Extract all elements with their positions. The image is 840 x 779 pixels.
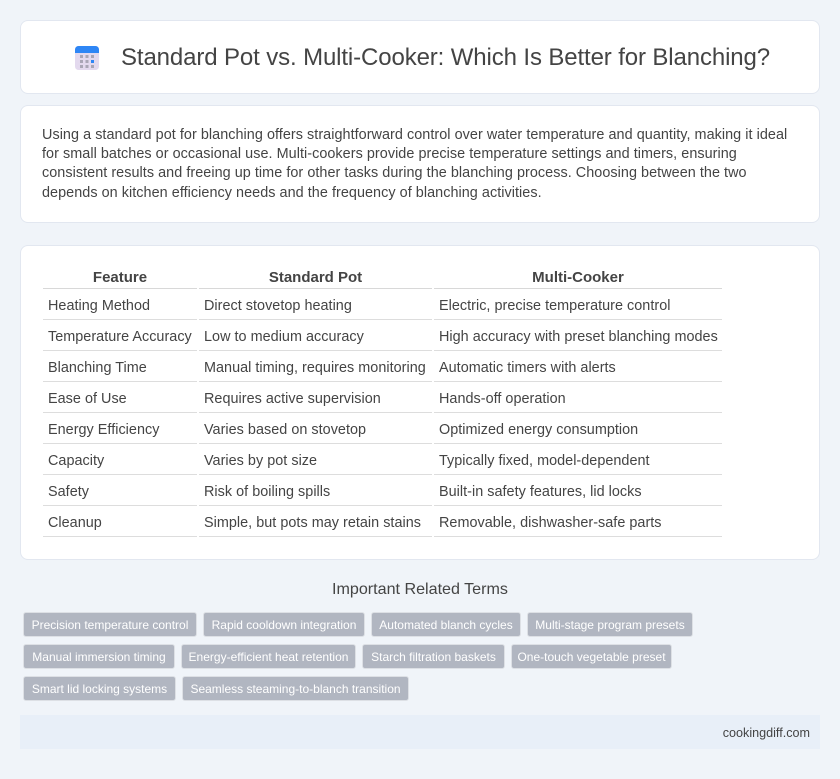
panel: comparison table xyxy=(20,245,820,560)
row: safety xyxy=(43,484,722,506)
panel: title card xyxy=(20,20,820,94)
row: capacity xyxy=(43,453,722,475)
footer bar xyxy=(20,715,820,749)
tag list: related terms: Starch filtration baskets xyxy=(371,650,496,664)
row: energy efficiency xyxy=(43,422,722,444)
row: cleanup: Simple, but pots may retain stains xyxy=(204,515,421,531)
row: safety: Risk of boiling spills xyxy=(204,484,330,500)
text block: intro: Using a standard pot for blanching offers straightforward control over water temperature and quantity, making it ideal xyxy=(42,127,787,143)
table header: Standard Pot xyxy=(269,269,362,286)
row: heating method: Direct stovetop heating xyxy=(204,298,352,314)
table header xyxy=(43,269,722,289)
row: safety: Safety xyxy=(48,484,89,500)
row: energy efficiency: Varies based on stovetop xyxy=(204,422,366,438)
row: blanching time: Blanching Time xyxy=(48,360,147,376)
tag list: related terms: One-touch vegetable preset xyxy=(517,650,666,664)
row: cleanup: Removable, dishwasher-safe parts xyxy=(439,515,662,531)
row: heating method: Electric, precise temperature control xyxy=(439,298,670,314)
row: energy efficiency: Energy Efficiency xyxy=(48,422,159,438)
row: cleanup: Cleanup xyxy=(48,515,102,531)
tag list: related terms: Precision temperature control xyxy=(32,618,188,632)
row: blanching time: Manual timing, requires monitoring xyxy=(204,360,426,376)
tag list: related terms: Smart lid locking systems xyxy=(32,682,167,696)
row: capacity: Varies by pot size xyxy=(204,453,317,469)
row: temperature accuracy: Temperature Accuracy xyxy=(48,329,192,345)
tag list: related terms: Seamless steaming-to-blanch transition xyxy=(190,682,401,696)
row: energy efficiency: Optimized energy consumption xyxy=(439,422,638,438)
tag list: related terms xyxy=(23,612,693,701)
row: safety: Built-in safety features, lid locks xyxy=(439,484,642,500)
row: capacity: Capacity xyxy=(48,453,104,469)
row: temperature accuracy xyxy=(43,329,722,351)
row: cleanup xyxy=(43,515,722,537)
row: heating method xyxy=(43,298,722,320)
row: heating method: Heating Method xyxy=(48,298,150,314)
text block: intro: depends on kitchen efficiency needs and the frequency of blanching activities. xyxy=(42,185,542,201)
heading: related terms: Important Related Terms xyxy=(332,580,508,598)
text block: intro xyxy=(42,127,787,201)
panel: intro paragraph xyxy=(20,105,820,223)
tag list: related terms: Multi-stage program presets xyxy=(535,618,685,632)
title: Standard Pot vs. Multi-Cooker: Which Is Better for Blanching? xyxy=(121,44,770,71)
row: blanching time xyxy=(43,360,722,382)
row: temperature accuracy: High accuracy with preset blanching modes xyxy=(439,329,718,345)
row: ease of use: Hands-off operation xyxy=(439,391,566,407)
row: ease of use: Ease of Use xyxy=(48,391,127,407)
row: blanching time: Automatic timers with alerts xyxy=(439,360,616,376)
footer source text: cookingdiff.com xyxy=(723,726,810,740)
tag list: related terms: Rapid cooldown integration xyxy=(212,618,356,632)
icon: calendar xyxy=(75,46,99,70)
tag list: related terms: Manual immersion timing xyxy=(32,650,166,664)
row: ease of use: Requires active supervision xyxy=(204,391,381,407)
row: temperature accuracy: Low to medium accuracy xyxy=(204,329,364,345)
row: ease of use xyxy=(43,391,722,413)
text block: intro: for small batches or occasional use. Multi-cookers provide precise temperature settings and timers, ensuring xyxy=(42,146,737,162)
tag list: related terms: Energy-efficient heat retention xyxy=(189,650,348,664)
table header: Feature xyxy=(93,269,147,286)
table header: Multi-Cooker xyxy=(532,269,624,286)
text block: intro: consistent results and freeing up time for other tasks during the blanching process. Choosing between the two xyxy=(42,165,747,181)
row: capacity: Typically fixed, model-dependent xyxy=(439,453,650,469)
tag list: related terms: Automated blanch cycles xyxy=(379,618,513,632)
